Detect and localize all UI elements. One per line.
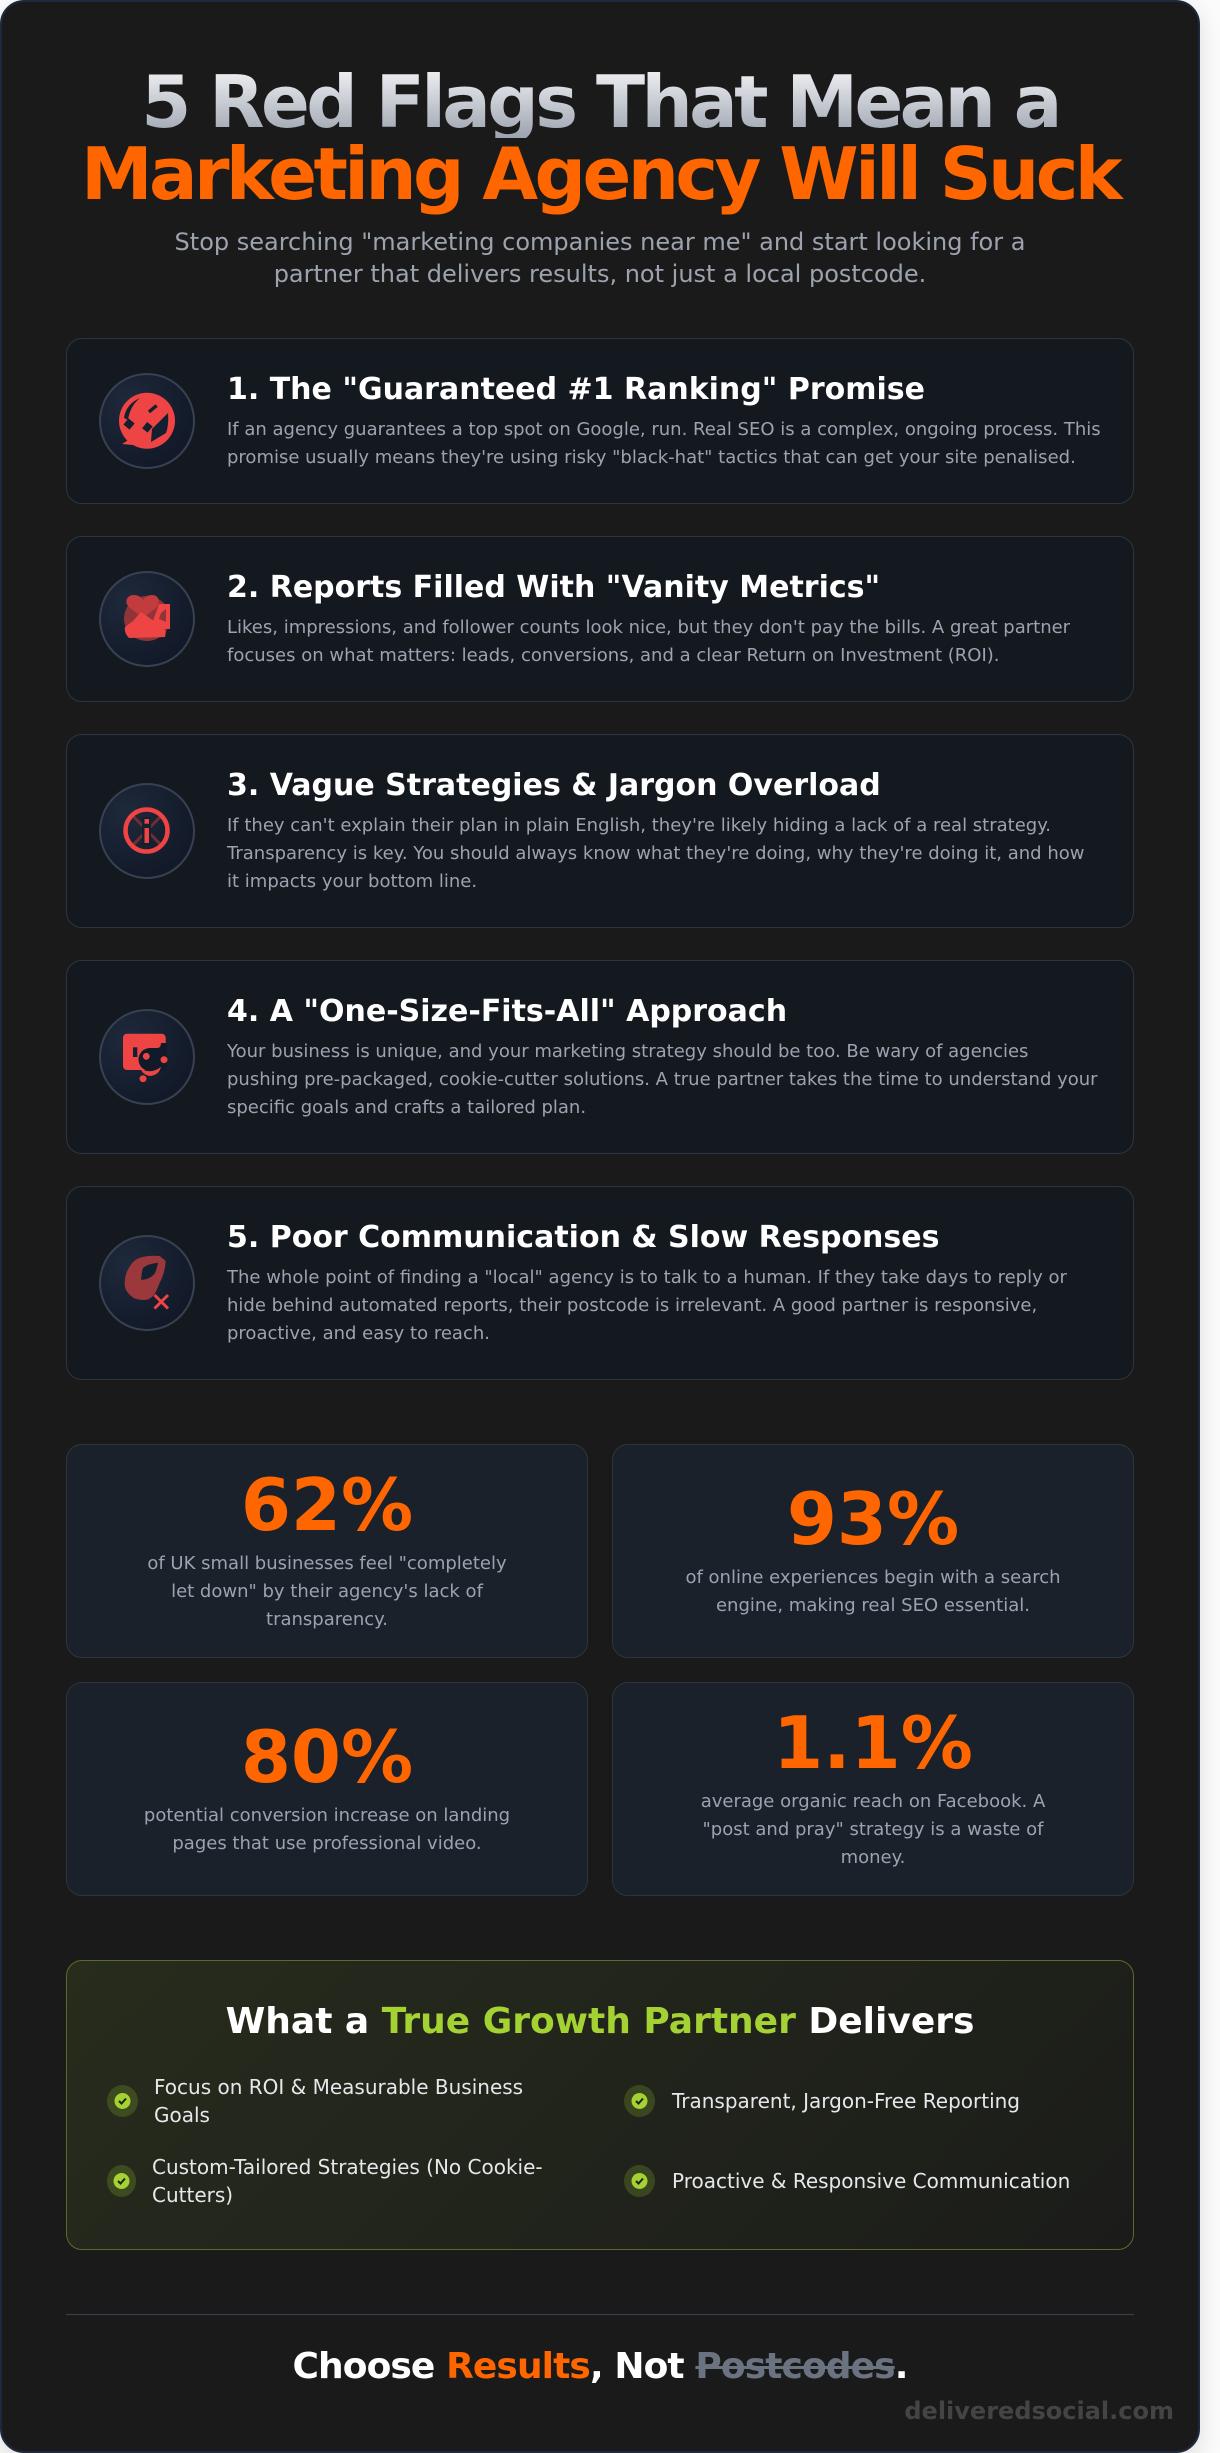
stat: 62%: transparency. bbox=[266, 1609, 388, 1630]
stat: 93%: 93% bbox=[787, 1477, 959, 1561]
text: flag 4: 4. A "One-Size-Fits-All" Approach bbox=[227, 994, 787, 1029]
subtitle: partner that delivers results, not just a local postcode. bbox=[274, 260, 926, 288]
text: flag 2: focuses on what matters: leads, conversions, and a clear Return on Investment (ROI). bbox=[227, 645, 1000, 666]
stat: 93%: of online experiences begin with a search bbox=[685, 1567, 1061, 1588]
text: flag 2: Likes, impressions, and follower counts look nice, but they don't pay the bills. A great partner bbox=[227, 617, 1070, 638]
panel: red flag 3 bbox=[66, 734, 1134, 928]
list item: reporting: Transparent, Jargon-Free Reporting bbox=[672, 2089, 1020, 2113]
list item: custom strategies bbox=[107, 2155, 543, 2207]
icon: guaranteed ranking bbox=[99, 373, 195, 469]
text: flag 5: proactive, and easy to reach. bbox=[227, 1323, 490, 1344]
stats grid bbox=[66, 1444, 1134, 1896]
text: flag 1: If an agency guarantees a top spot on Google, run. Real SEO is a complex, ongoing process. This bbox=[227, 419, 1101, 440]
subtitle: Stop searching "marketing companies near me" and start looking for a bbox=[175, 228, 1025, 256]
list item: communication bbox=[624, 2165, 1070, 2197]
stat: 80%: pages that use professional video. bbox=[172, 1833, 482, 1854]
text: flag 5: The whole point of finding a "local" agency is to talk to a human. If they take days to reply or bbox=[227, 1267, 1067, 1288]
text: flag 3: it impacts your bottom line. bbox=[227, 871, 477, 892]
text: flag 4: specific goals and crafts a tailored plan. bbox=[227, 1097, 586, 1118]
panel: red flag 4 bbox=[66, 960, 1134, 1154]
text: flag 2 bbox=[227, 570, 1070, 666]
stat: 80%: 80% bbox=[241, 1715, 413, 1799]
text: flag 1: promise usually means they're using risky "black-hat" tactics that can get your site penalised. bbox=[227, 447, 1076, 468]
list item: ROI: Focus on ROI & Measurable Business bbox=[154, 2075, 523, 2099]
icon: one size fits all bbox=[99, 1009, 195, 1105]
list item: communication: Proactive & Responsive Communication bbox=[672, 2169, 1070, 2193]
text: flag 3: 3. Vague Strategies & Jargon Overload bbox=[227, 768, 881, 803]
icon: vanity metrics bbox=[99, 571, 195, 667]
text: flag 5: 5. Poor Communication & Slow Responses bbox=[227, 1220, 939, 1255]
text: flag 1 bbox=[227, 372, 1101, 468]
text: flag 4: Your business is unique, and your marketing strategy should be too. Be wary of agencies bbox=[227, 1041, 1028, 1062]
title: Marketing Agency Will Suck bbox=[81, 132, 1119, 216]
stat: 80%: potential conversion increase on landing bbox=[144, 1805, 510, 1826]
stat: 1.1%: "post and pray" strategy is a waste of bbox=[702, 1819, 1043, 1840]
stat: 62%: let down" by their agency's lack of bbox=[171, 1581, 483, 1602]
title bbox=[81, 60, 1124, 216]
text: flag 3: If they can't explain their plan in plain English, they're likely hiding a lack of a real strategy. bbox=[227, 815, 1051, 836]
text: flag 1: 1. The "Guaranteed #1 Ranking" Promise bbox=[227, 372, 925, 407]
title: 5 Red Flags That Mean a bbox=[141, 60, 1059, 144]
watermark: deliveredsocial.com bbox=[904, 2397, 1174, 2425]
list item: ROI: Goals bbox=[154, 2103, 210, 2127]
list item: custom strategies: Cutters) bbox=[152, 2183, 233, 2207]
checklist bbox=[107, 2075, 1070, 2207]
stat: 1.1%: average organic reach on Facebook. A bbox=[701, 1791, 1045, 1812]
panel: red flag 5 bbox=[66, 1186, 1134, 1380]
stat: 62%: of UK small businesses feel "completely bbox=[147, 1553, 507, 1574]
panel: red flag 2 bbox=[66, 536, 1134, 702]
list item: reporting bbox=[624, 2085, 1020, 2117]
text: flag 4 bbox=[227, 994, 1098, 1118]
heading: true growth partner: What a True Growth Partner Delivers bbox=[226, 2001, 974, 2042]
stat: 80% bbox=[66, 1682, 588, 1896]
panel: red flag 1 bbox=[66, 338, 1134, 504]
stat: 1.1%: 1.1% bbox=[773, 1701, 973, 1785]
stat: 93% bbox=[612, 1444, 1134, 1658]
text: flag 4: pushing pre-packaged, cookie-cutter solutions. A true partner takes the time to understand your bbox=[227, 1069, 1098, 1090]
text: flag 2: 2. Reports Filled With "Vanity Metrics" bbox=[227, 570, 880, 605]
text: flag 5 bbox=[226, 1220, 1067, 1344]
icon: vague strategy info bbox=[99, 783, 195, 879]
text: flag 3: Transparency is key. You should always know what they're doing, why they're doing it, and how bbox=[227, 843, 1084, 864]
stat: 1.1% bbox=[612, 1682, 1134, 1896]
call to action: Choose Results, Not Postcodes. bbox=[292, 2346, 908, 2387]
list item: custom strategies: Custom-Tailored Strategies (No Cookie- bbox=[152, 2155, 543, 2179]
icon: poor communication bbox=[99, 1235, 195, 1331]
panel: true growth partner bbox=[66, 1960, 1134, 2250]
stat: 62% bbox=[66, 1444, 588, 1658]
stat: 93%: engine, making real SEO essential. bbox=[716, 1595, 1030, 1616]
list item: ROI bbox=[107, 2075, 523, 2127]
subtitle bbox=[175, 228, 1025, 288]
stat: 1.1%: money. bbox=[841, 1847, 905, 1868]
text: flag 5: hide behind automated reports, their postcode is irrelevant. A good partner is responsive, bbox=[227, 1295, 1037, 1316]
text: flag 3 bbox=[226, 768, 1084, 892]
stat: 62%: 62% bbox=[241, 1463, 413, 1547]
